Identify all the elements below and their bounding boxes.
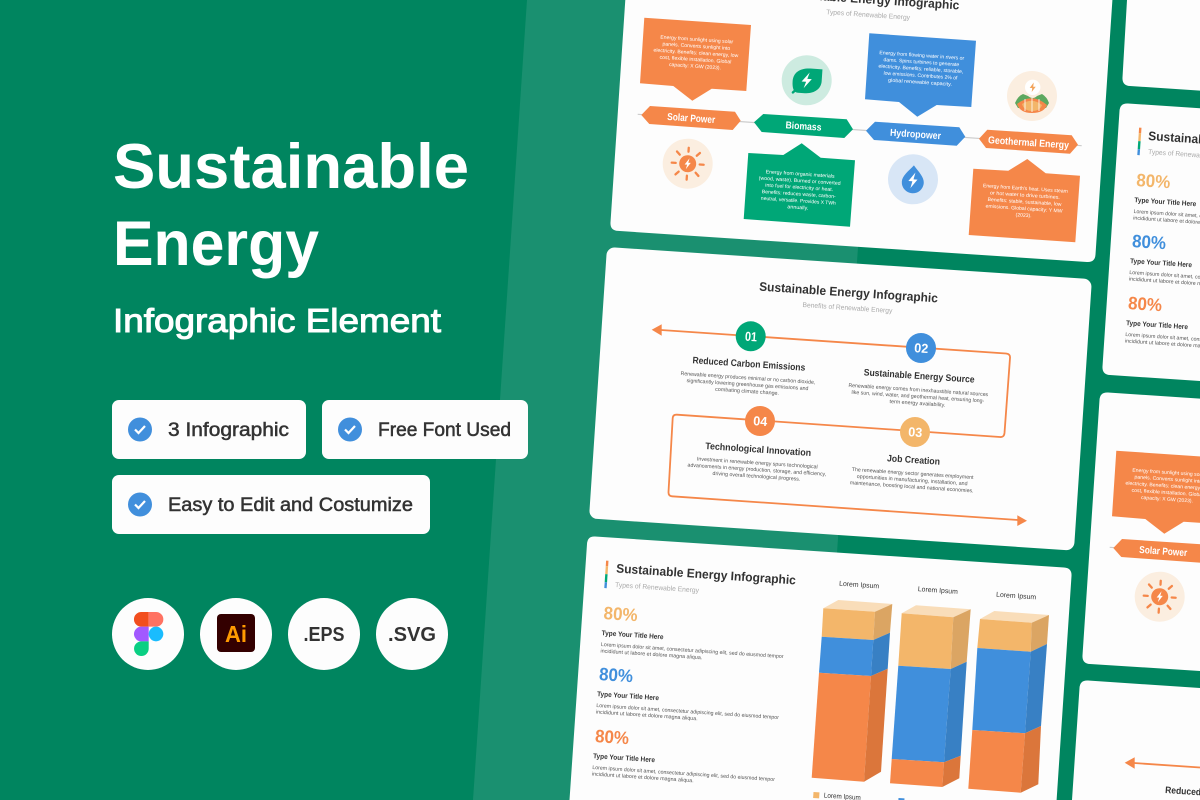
stat block 3 <box>592 726 778 790</box>
label: Biomass <box>754 114 853 138</box>
bar labels: Lorem Ipsum <box>996 592 1036 601</box>
stat block 1 <box>1133 170 1200 234</box>
callout: hydropower: dams. Spins turbines to generate <box>883 57 960 68</box>
step 02 marker: 02 <box>914 340 929 356</box>
panel subheading: Types of Renewable Energy <box>615 582 700 595</box>
text: Job Creation: maintenance, boosting local and national economies. <box>850 480 974 494</box>
callout: solar: cost, flexible installation. Global <box>1131 488 1200 498</box>
stat block 2: incididunt ut labore et dolore magna aliqua. <box>596 709 698 722</box>
panel: right column benefits card <box>1072 680 1200 800</box>
label: Solar Power <box>641 106 741 130</box>
panel heading: Sustainable Energy Infographic <box>616 562 796 587</box>
callout: solar: capacity: X GW (2023). <box>669 62 721 71</box>
stat block 3: Type Your Title Here <box>1126 320 1188 331</box>
step 02 marker <box>906 333 936 363</box>
callout: biomass: into fuel for electricity or heat. <box>765 183 833 193</box>
text: Technological Innovation: Technological Innovation <box>705 441 812 459</box>
stat block 2 <box>1129 231 1200 295</box>
icon: EPS: .EPS <box>304 624 344 646</box>
callout: solar: panels. Converts sunlight into <box>1134 474 1200 485</box>
bar 2 <box>890 605 971 787</box>
icon: EPS <box>288 598 360 670</box>
text: Job Creation: Job Creation <box>887 453 940 468</box>
stat block 3: Type Your Title Here <box>593 753 655 764</box>
text: Sustainable Energy Source <box>847 366 990 412</box>
icon: Adobe Illustrator <box>200 598 272 670</box>
icon: Figma <box>112 598 184 670</box>
arrow: flow start <box>1125 757 1200 769</box>
stat block 1: Lorem ipsum dolor sit amet, consectetur adipiscing elit, sed do eiusmod tempor <box>601 642 784 660</box>
panel: benefits of renewable energy flow <box>589 247 1092 551</box>
icon: SVG: .SVG <box>388 624 436 646</box>
step 01 marker: 01 <box>745 329 757 344</box>
callout: hydropower: electricity. Benefits: reliable, storable, <box>878 64 963 75</box>
icon: SVG <box>376 598 448 670</box>
callout: geothermal: emissions. Global capacity: Y MW <box>985 204 1063 215</box>
text: Sustainable Energy Source: Sustainable Energy Source <box>863 367 975 386</box>
accent bar <box>604 561 608 588</box>
bar labels: Lorem Ipsum <box>839 581 879 590</box>
feature pill: Free Font Used <box>322 400 528 459</box>
callout: biomass <box>744 143 855 227</box>
panel: types of renewable energy timeline <box>610 0 1112 262</box>
label: Solar Power: Solar Power <box>1139 545 1188 559</box>
label: Hydropower: Hydropower <box>890 128 941 142</box>
icon: geothermal <box>1007 71 1057 121</box>
callout: geothermal: Energy from Earth's heat. Uses steam <box>983 183 1068 195</box>
stat block 3: 80% <box>1127 293 1163 315</box>
icon: Adobe Illustrator: Ai <box>225 621 247 647</box>
callout: solar: panels. Converts sunlight into <box>662 41 731 52</box>
stat block 1: 80% <box>603 603 638 625</box>
callout: geothermal: or hot water to drive turbines. <box>990 190 1060 201</box>
step 01 marker <box>736 321 766 351</box>
callout: hydropower: global renewable capacity. <box>888 78 952 88</box>
stat block 2 <box>596 664 782 728</box>
callout: solar <box>640 18 751 101</box>
stat block 1: Type Your Title Here <box>601 630 664 641</box>
feature pill: 3 Infographic: 3 Infographic <box>168 420 289 441</box>
text: Job Creation <box>850 451 976 494</box>
icon: sun <box>1133 570 1186 623</box>
stat block 2: Lorem ipsum dolor sit amet, consectetur adipiscing elit, sed do eiusmod tempor <box>596 703 779 721</box>
callout: geothermal <box>969 159 1080 242</box>
label: Solar Power <box>1113 539 1200 563</box>
callout: biomass: Energy from organic materials <box>765 169 835 180</box>
feature pill: Free Font Used: Free Font Used <box>378 420 511 441</box>
stat block 3: Lorem ipsum dolor sit amet, consectetur adipiscing elit, sed do eiusmod tempor <box>592 765 775 783</box>
stat block 3: 80% <box>594 726 630 748</box>
stat block 2: 80% <box>1131 231 1167 253</box>
text: Technological Innovation: advancements in energy production, storage, and efficiency, <box>687 463 826 478</box>
stat block 2: 80% <box>598 664 634 686</box>
callout: solar <box>1112 451 1200 534</box>
arrow: flow path <box>652 324 1027 526</box>
text: Technological Innovation: driving overall technological progress. <box>712 471 800 483</box>
bar labels <box>839 581 1036 601</box>
callout: hydropower <box>865 33 976 117</box>
step 04 marker <box>745 406 775 436</box>
callout: biomass: annually. <box>787 204 809 212</box>
stat block 1 <box>600 603 786 667</box>
stat block 3: incididunt ut labore et dolore magna aliqua. <box>592 771 694 784</box>
panel: right column statistics card <box>1102 103 1200 381</box>
callout: hydropower: low emissions. Contributes 2% of <box>883 71 958 82</box>
callout: geothermal: Benefits: stable, sustainable, low <box>987 197 1062 208</box>
text: Sustainable Energy Source: Renewable energy comes from inexhaustible natural sources <box>848 383 989 398</box>
callout: solar: Energy from sunlight using solar <box>660 35 734 45</box>
stat block 1: Type Your Title Here <box>1134 197 1197 208</box>
label: Biomass: Biomass <box>785 120 822 134</box>
text: Technological Innovation: Investment in renewable energy spurs technological <box>697 456 818 470</box>
panel: top right cropped card <box>1122 0 1200 91</box>
stat block 3 <box>1125 293 1200 357</box>
callout: solar: cost, flexible installation. Global <box>659 55 732 65</box>
icon: water drop <box>886 153 940 206</box>
title: Sustainable <box>113 132 469 202</box>
bar 1 <box>812 600 892 782</box>
icon: sun <box>661 137 714 190</box>
icon: leaf <box>780 54 833 107</box>
callout: hydropower: Energy from flowing water in rivers or <box>879 50 965 62</box>
text: Reduced Carbon Emissions: Reduced Carbon Emissions <box>692 355 806 374</box>
title: Energy <box>113 209 319 279</box>
text: Reduced Carbon Emissions: Renewable energy produces minimal or no carbon dioxide, <box>680 371 815 386</box>
panel heading: Sustainable Energy Infographic <box>759 280 938 305</box>
step 04 marker: 04 <box>753 413 769 429</box>
text: Job Creation: opportunities in manufacturing, installation, and <box>857 474 968 487</box>
subtitle: Infographic Element <box>113 302 441 339</box>
label: Solar Power: Solar Power <box>667 112 716 126</box>
callout: biomass: (wood, waste). Burned or converted <box>759 175 841 187</box>
panel: stacked bar statistics <box>570 536 1072 800</box>
text: Reduced Carbon Emissions <box>679 355 817 399</box>
panel subheading: Benefits of Renewable Energy <box>802 302 893 315</box>
stat block 2: Type Your Title Here <box>597 691 659 702</box>
step 03 marker: 03 <box>908 424 923 440</box>
stat block 1: 80% <box>1136 170 1171 192</box>
step 03 marker <box>900 417 930 447</box>
text: Sustainable Energy Source: like sun, wind, water, and geothermal heat, ensuring long- <box>851 390 985 405</box>
callout: biomass: neutral, versatile. Provides X TWh <box>761 196 836 207</box>
callout: geothermal: (2023). <box>1015 212 1032 219</box>
feature pill: Easy to Edit and Costumize: Easy to Edit and Costumize <box>168 495 413 516</box>
chart: 3D stacked bars <box>812 581 1049 793</box>
text: Reduced Carbon Emissions: significantly lowering greenhouse gas emissions and <box>686 378 809 392</box>
panel subheading: Types of Renewable Energy <box>826 9 911 22</box>
text: Job Creation: The renewable energy sector generates employment <box>852 467 974 481</box>
legend <box>813 792 904 800</box>
label: Hydropower <box>866 122 965 146</box>
label: Geothermal Energy: Geothermal Energy <box>988 135 1070 152</box>
feature pill: Easy to Edit and Costumize <box>112 475 430 534</box>
label: Geothermal Energy <box>979 130 1078 154</box>
callout: solar: electricity. Benefits: clean energy, low <box>653 48 739 59</box>
bar labels: Lorem Ipsum <box>918 586 958 596</box>
accent bar <box>1137 128 1141 155</box>
text: Sustainable Energy Source: term energy availability. <box>889 399 945 409</box>
callout: solar: capacity: X GW (2023). <box>1141 495 1193 504</box>
bar 3 <box>968 611 1049 793</box>
callout: biomass: Benefits: reduces waste, carbon- <box>762 189 836 200</box>
stat block 2: Type Your Title Here <box>1130 258 1192 269</box>
text: Technological Innovation <box>687 440 828 484</box>
title <box>113 132 469 279</box>
stat block 1: incididunt ut labore et dolore magna aliqua. <box>600 648 702 661</box>
panel: right column timeline card <box>1082 392 1200 671</box>
feature pill: 3 Infographic <box>112 400 306 459</box>
text: Reduced Carbon Emissions: combating climate change. <box>715 387 779 397</box>
